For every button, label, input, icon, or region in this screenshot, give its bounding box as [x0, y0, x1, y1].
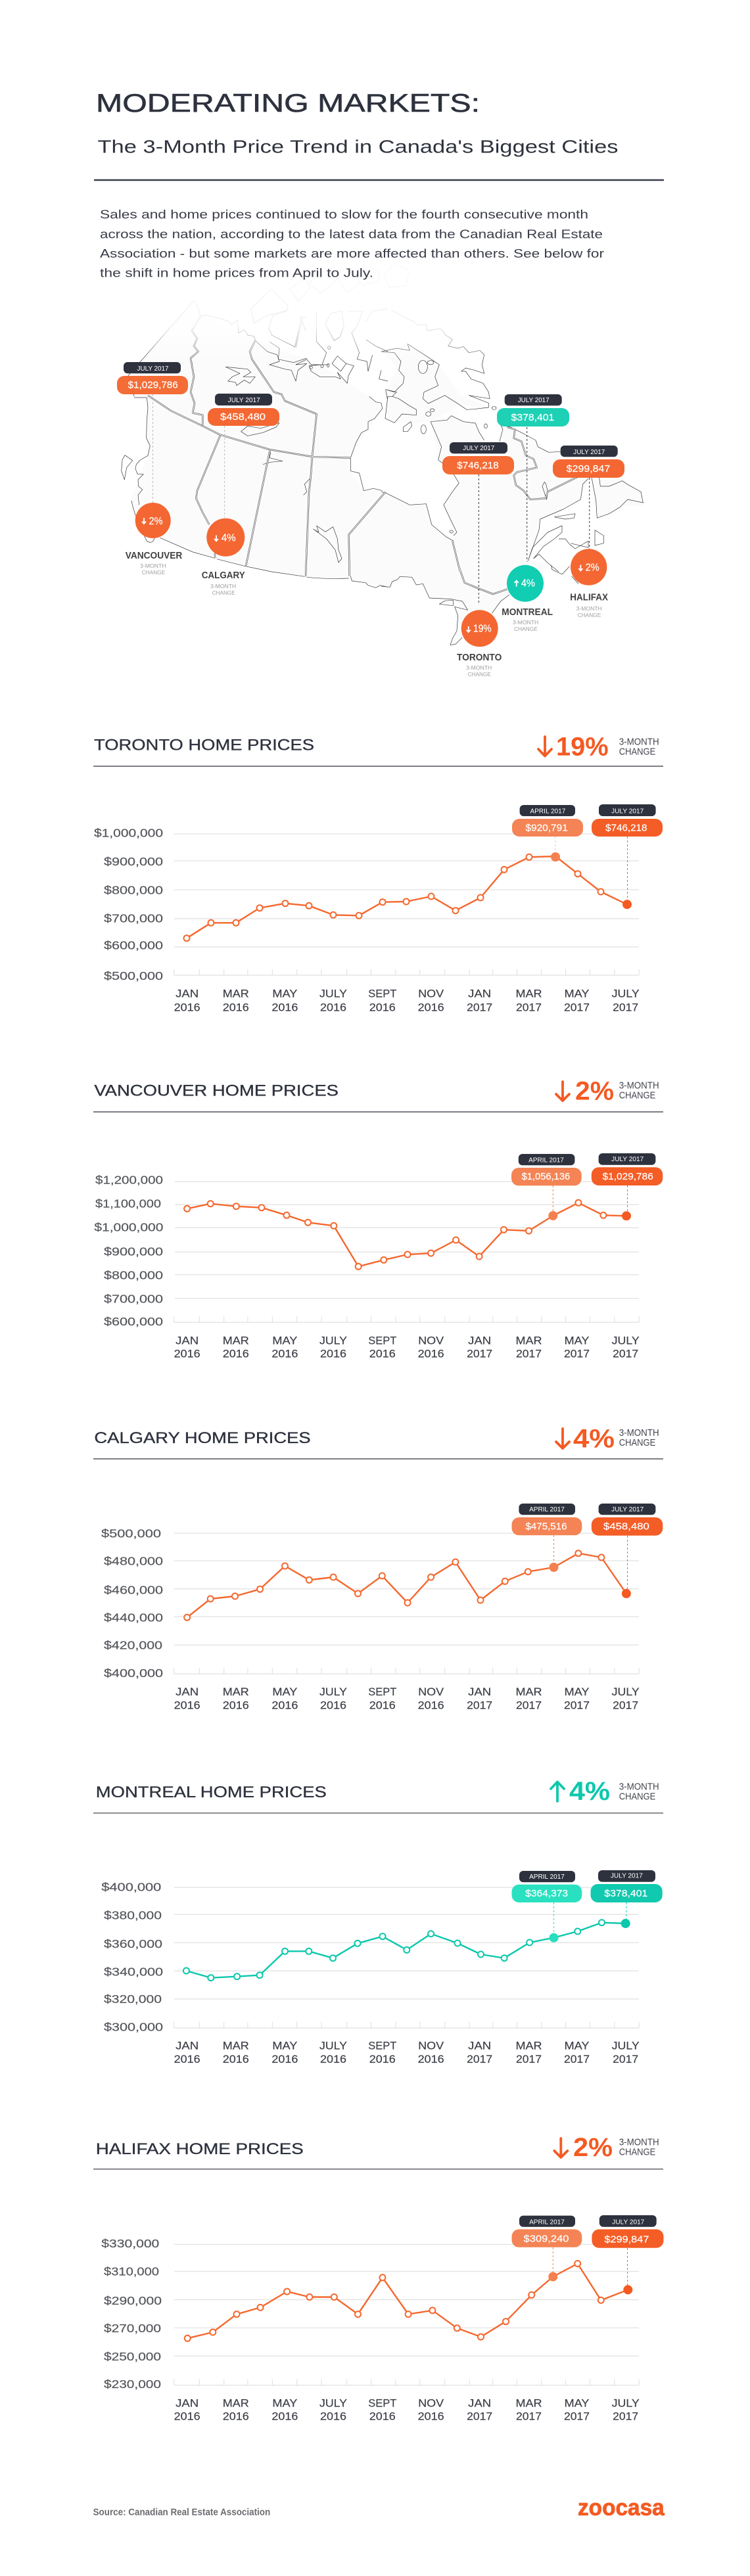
- map callout: Halifax: 2%: [586, 562, 599, 573]
- y axis labels: Toronto: $600,000: [104, 938, 163, 952]
- map callout: Montreal: [497, 394, 569, 632]
- x axis labels: Montreal: JULY: [612, 2039, 640, 2052]
- y axis labels: Calgary: $480,000: [104, 1554, 163, 1567]
- y axis labels: Vancouver: $700,000: [104, 1292, 163, 1305]
- stat: Toronto 3-month change: 19%: [556, 732, 609, 761]
- callout: Vancouver April 2017: APRIL 2017: [528, 1157, 564, 1164]
- map callout: Vancouver: $1,029,786: [128, 380, 178, 391]
- map callout: Calgary: CHANGE: [212, 589, 235, 596]
- panel: Toronto home prices: [93, 732, 663, 1013]
- x axis labels: Halifax: 2017: [564, 2410, 590, 2423]
- x axis labels: Vancouver: JAN: [176, 1334, 199, 1346]
- map callout: Calgary: JULY 2017: [228, 397, 260, 404]
- y axis labels: Montreal: $360,000: [104, 1937, 162, 1950]
- x axis labels: Halifax: 2016: [174, 2410, 200, 2423]
- x axis labels: Toronto: JAN: [176, 987, 199, 1000]
- y axis labels: Toronto: $900,000: [104, 855, 163, 868]
- y axis labels: Calgary: $400,000: [104, 1667, 163, 1680]
- line series: Montreal: [186, 1923, 626, 1978]
- stat: Montreal 3-month change: CHANGE: [619, 1791, 655, 1802]
- map callout: Halifax: JULY 2017: [573, 449, 605, 456]
- map callout: Montreal: MONTREAL: [502, 607, 553, 618]
- x axis labels: Toronto: 2016: [223, 1001, 249, 1013]
- x axis labels: Calgary: JAN: [176, 1686, 199, 1698]
- x axis labels: Calgary: 2016: [320, 1699, 346, 1711]
- y axis labels: Toronto: [94, 826, 163, 982]
- map of Canada: [85, 260, 664, 645]
- x axis labels: Calgary: 2017: [516, 1699, 542, 1711]
- x axis labels: Vancouver: JAN: [468, 1334, 491, 1346]
- x axis labels: Calgary: 2017: [613, 1699, 638, 1711]
- map callout: Calgary: CALGARY: [202, 570, 245, 581]
- map callout: Toronto: TORONTO: [457, 653, 502, 663]
- x axis labels: Halifax: MAR: [515, 2397, 542, 2410]
- stat: Vancouver 3-month change: [556, 1076, 659, 1105]
- stat: Calgary 3-month change: 4%: [573, 1424, 615, 1453]
- x axis labels: Toronto: [174, 987, 640, 1013]
- heading: Calgary: CALGARY HOME PRICES: [94, 1429, 311, 1447]
- x axis labels: Vancouver: SEPT: [368, 1334, 396, 1346]
- map callout: Vancouver: CHANGE: [142, 569, 166, 576]
- map callout: Halifax: CHANGE: [578, 612, 601, 618]
- y axis labels: Toronto: $800,000: [104, 883, 163, 896]
- callout: Toronto April 2017: APRIL 2017: [530, 808, 566, 815]
- stat: Calgary 3-month change: CHANGE: [619, 1437, 655, 1448]
- map callout: Montreal: 4%: [521, 578, 535, 589]
- x axis labels: Halifax: JULY: [612, 2397, 640, 2410]
- x axis labels: Vancouver: 2016: [320, 1347, 346, 1360]
- stat: Halifax 3-month change: 2%: [573, 2133, 613, 2162]
- x axis labels: Toronto: JULY: [612, 987, 640, 1000]
- y axis labels: Halifax: $270,000: [104, 2322, 161, 2335]
- logo: zoocasa: zoocasa: [578, 2495, 665, 2520]
- stat: Halifax 3-month change: 3-MONTH: [619, 2137, 659, 2148]
- map callout: Calgary: 4%: [222, 532, 236, 543]
- subtitle: The 3-Month Price Trend in Canada's Biggest Cities: [97, 137, 618, 157]
- heading: Toronto: TORONTO HOME PRICES: [94, 737, 314, 754]
- x axis labels: Halifax: JAN: [468, 2397, 491, 2410]
- x axis labels: Halifax: 2016: [271, 2410, 298, 2423]
- y axis labels: Halifax: [101, 2237, 162, 2391]
- y axis labels: Calgary: $500,000: [101, 1527, 161, 1540]
- x axis labels: Vancouver: 2017: [564, 1347, 590, 1360]
- y axis labels: Vancouver: [94, 1173, 164, 1328]
- map dashed leader lines: [152, 394, 590, 605]
- y axis labels: Vancouver: $1,100,000: [95, 1197, 161, 1210]
- y axis labels: Calgary: $440,000: [104, 1611, 163, 1624]
- x axis labels: Montreal: 2016: [418, 2053, 444, 2065]
- x axis labels: Halifax: 2017: [467, 2410, 492, 2423]
- x axis labels: Vancouver: MAR: [515, 1334, 542, 1346]
- heading: Halifax: HALIFAX HOME PRICES: [96, 2140, 304, 2158]
- x axis labels: Montreal: 2016: [369, 2053, 396, 2065]
- x axis labels: Halifax: 2016: [418, 2410, 444, 2423]
- callout: Calgary April 2017: $475,516: [526, 1521, 567, 1532]
- y axis labels: Halifax: $230,000: [104, 2378, 161, 2391]
- callout: Halifax April 2017: $309,240: [523, 2234, 569, 2244]
- stat: Vancouver 3-month change: 3-MONTH: [619, 1080, 659, 1092]
- map callout: Halifax: 3-MONTH: [576, 605, 602, 612]
- x axis labels: Montreal: 2017: [467, 2053, 492, 2065]
- x axis labels: Halifax: [174, 2397, 640, 2423]
- panel: Vancouver home prices: [93, 1076, 663, 1360]
- x axis labels: Halifax: NOV: [418, 2397, 444, 2410]
- x axis labels: Halifax: 2016: [320, 2410, 346, 2423]
- stat: Montreal 3-month change: 4%: [569, 1777, 610, 1806]
- x axis labels: Vancouver: [174, 1334, 640, 1360]
- map callout: Toronto: 19%: [473, 624, 492, 635]
- chart: Toronto line chart: [94, 804, 663, 1013]
- x axis labels: Calgary: 2016: [174, 1699, 200, 1711]
- x axis labels: Toronto: MAY: [564, 987, 589, 1000]
- x axis labels: Calgary: NOV: [418, 1686, 444, 1698]
- x axis labels: Toronto: 2016: [174, 1001, 200, 1013]
- x axis labels: Halifax: MAY: [564, 2397, 589, 2410]
- data points: Toronto: [184, 854, 603, 941]
- callout: Halifax July 2017: $299,847: [604, 2234, 649, 2245]
- x axis labels: Halifax: MAY: [272, 2397, 297, 2410]
- x axis labels: Montreal: 2017: [564, 2053, 590, 2065]
- x axis labels: Toronto: 2016: [271, 1001, 298, 1013]
- x axis labels: Vancouver: 2016: [271, 1347, 298, 1360]
- y axis labels: Montreal: $400,000: [101, 1880, 162, 1893]
- callout: Halifax July 2017: [592, 2215, 664, 2294]
- x axis labels: Halifax: JULY: [319, 2397, 347, 2410]
- callout: Toronto April 2017: $920,791: [525, 823, 568, 833]
- x axis labels: Montreal: SEPT: [368, 2039, 396, 2052]
- y axis labels: Calgary: [101, 1527, 163, 1680]
- y axis labels: Vancouver: $1,000,000: [94, 1220, 164, 1233]
- x axis labels: Halifax: 2017: [613, 2410, 638, 2423]
- x axis labels: Calgary: JAN: [468, 1686, 491, 1698]
- x axis labels: Toronto: MAY: [272, 987, 297, 1000]
- x axis labels: Halifax: SEPT: [368, 2397, 396, 2410]
- callout: Halifax July 2017: JULY 2017: [612, 2219, 645, 2226]
- map callout: Montreal: CHANGE: [514, 626, 538, 632]
- map callout: Halifax: $299,847: [567, 464, 610, 474]
- x axis labels: Calgary: 2016: [369, 1699, 396, 1711]
- x axis labels: Toronto: SEPT: [368, 987, 396, 1000]
- x axis labels: Vancouver: 2016: [174, 1347, 200, 1360]
- callout: Calgary April 2017: [511, 1504, 582, 1572]
- map callout: Halifax: HALIFAX: [570, 592, 608, 603]
- x axis labels: Montreal: [174, 2039, 640, 2065]
- x axis labels: Montreal: 2016: [174, 2053, 200, 2065]
- callout: Halifax April 2017: APRIL 2017: [529, 2219, 565, 2226]
- x axis labels: Montreal: 2017: [613, 2053, 638, 2065]
- x axis labels: Montreal: JAN: [176, 2039, 199, 2052]
- callout: Toronto July 2017: $746,218: [605, 823, 647, 833]
- stat: Toronto 3-month change: CHANGE: [619, 746, 655, 757]
- x axis labels: Toronto: 2017: [564, 1001, 590, 1013]
- intro paragraph: Sales and home prices continued to slow for the fourth consecutive month: [100, 208, 588, 221]
- y axis labels: Calgary: $460,000: [104, 1583, 163, 1596]
- x axis labels: Toronto: 2016: [320, 1001, 346, 1013]
- x axis labels: Toronto: 2017: [613, 1001, 638, 1013]
- x axis labels: Toronto: MAR: [223, 987, 249, 1000]
- stat: Vancouver 3-month change: 2%: [575, 1076, 614, 1105]
- x axis labels: Montreal: MAY: [564, 2039, 589, 2052]
- x axis labels: Toronto: 2016: [418, 1001, 444, 1013]
- callout: Montreal July 2017: $378,401: [604, 1889, 647, 1899]
- x axis labels: Halifax: JAN: [176, 2397, 199, 2410]
- map callout: Vancouver: VANCOUVER: [126, 551, 183, 561]
- map callout: Toronto: $746,218: [457, 461, 499, 471]
- callout: Calgary July 2017: $458,480: [603, 1522, 649, 1532]
- x axis labels: Vancouver: 2016: [369, 1347, 396, 1360]
- callout: Halifax April 2017: [511, 2216, 582, 2282]
- map callout: Toronto: CHANGE: [468, 671, 491, 678]
- line series: Vancouver: [187, 1203, 626, 1266]
- y axis labels: Halifax: $250,000: [104, 2350, 161, 2363]
- callout: Calgary April 2017: APRIL 2017: [529, 1506, 565, 1513]
- x axis labels: Vancouver: NOV: [418, 1334, 444, 1346]
- callout: Vancouver July 2017: JULY 2017: [611, 1156, 644, 1163]
- map callout: Vancouver: 2%: [149, 516, 163, 527]
- x axis labels: Vancouver: 2017: [613, 1347, 638, 1360]
- data points: Calgary: [184, 1550, 604, 1621]
- x axis labels: Toronto: 2017: [516, 1001, 542, 1013]
- map callout: Montreal: 3-MONTH: [513, 619, 538, 626]
- x axis labels: Toronto: JAN: [468, 987, 491, 1000]
- map callout: Montreal: $378,401: [511, 413, 554, 423]
- callout: Vancouver April 2017: $1,056,136: [522, 1172, 570, 1182]
- x axis labels: Calgary: 2016: [271, 1699, 298, 1711]
- heading: Vancouver: VANCOUVER HOME PRICES: [94, 1082, 339, 1100]
- chart: Calgary line chart: [101, 1504, 663, 1711]
- callout: Calgary July 2017: JULY 2017: [611, 1506, 644, 1513]
- x axis labels: Vancouver: JULY: [612, 1334, 640, 1346]
- x axis labels: Montreal: 2016: [271, 2053, 298, 2065]
- x axis labels: Calgary: 2016: [223, 1699, 249, 1711]
- stat: Halifax 3-month change: [554, 2133, 659, 2162]
- y axis labels: Montreal: [101, 1880, 163, 2033]
- map callout: Calgary: $458,480: [220, 412, 266, 423]
- x axis labels: Halifax: 2017: [516, 2410, 542, 2423]
- stat: Toronto 3-month change: 3-MONTH: [619, 736, 659, 747]
- y axis labels: Montreal: $340,000: [104, 1965, 163, 1978]
- y axis labels: Montreal: $320,000: [104, 1992, 162, 2006]
- map callout: Calgary: 3-MONTH: [210, 583, 236, 589]
- x axis labels: Montreal: MAY: [272, 2039, 297, 2052]
- line series: Calgary: [187, 1553, 626, 1617]
- x axis labels: Toronto: 2017: [467, 1001, 492, 1013]
- y axis labels: Calgary: $420,000: [104, 1638, 162, 1651]
- x axis labels: Toronto: MAR: [515, 987, 542, 1000]
- callout: Montreal April 2017: $364,373: [525, 1889, 568, 1899]
- callout: Montreal July 2017: [590, 1870, 663, 1928]
- line series: Halifax: [187, 2264, 628, 2338]
- callout: Vancouver July 2017: $1,029,786: [603, 1172, 653, 1182]
- x axis labels: Montreal: 2016: [223, 2053, 249, 2065]
- stat: Montreal 3-month change: [551, 1777, 659, 1806]
- callout: Montreal April 2017: [511, 1871, 582, 1943]
- panel: Montreal home prices: [93, 1777, 663, 2065]
- callout: Toronto July 2017: JULY 2017: [611, 808, 644, 815]
- callout: Calgary July 2017: [592, 1504, 663, 1598]
- x axis labels: Calgary: 2016: [418, 1699, 444, 1711]
- intro paragraph: Association - but some markets are more affected than others. See below for: [100, 246, 604, 260]
- map callout: Vancouver: 3-MONTH: [140, 563, 166, 569]
- x axis labels: Toronto: JULY: [319, 987, 347, 1000]
- callout: Montreal April 2017: APRIL 2017: [529, 1874, 565, 1881]
- y axis labels: Toronto: $700,000: [104, 912, 163, 925]
- x axis labels: Calgary: 2017: [564, 1699, 590, 1711]
- title: MODERATING MARKETS:: [96, 89, 480, 118]
- map callout: Toronto: 3-MONTH: [466, 664, 492, 671]
- stat: Montreal 3-month change: 3-MONTH: [619, 1781, 659, 1792]
- chart: Vancouver line chart: [94, 1153, 663, 1360]
- y axis labels: Toronto: $1,000,000: [94, 826, 163, 839]
- heading: Montreal: MONTREAL HOME PRICES: [96, 1783, 327, 1801]
- x axis labels: Montreal: 2017: [516, 2053, 542, 2065]
- x axis labels: Calgary: [174, 1686, 640, 1711]
- x axis labels: Halifax: 2016: [369, 2410, 396, 2423]
- y axis labels: Halifax: $310,000: [104, 2265, 159, 2278]
- chart: Halifax line chart: [101, 2215, 664, 2423]
- callout: Montreal July 2017: JULY 2017: [611, 1873, 643, 1880]
- x axis labels: Montreal: NOV: [418, 2039, 444, 2052]
- data points: Montreal: [183, 1920, 605, 1981]
- x axis labels: Montreal: JAN: [468, 2039, 491, 2052]
- x axis labels: Calgary: 2017: [467, 1699, 492, 1711]
- x axis labels: Vancouver: 2017: [467, 1347, 492, 1360]
- x axis labels: Montreal: MAR: [515, 2039, 542, 2052]
- x axis labels: Vancouver: MAY: [272, 1334, 297, 1346]
- x axis labels: Calgary: JULY: [612, 1686, 640, 1698]
- x axis labels: Vancouver: 2016: [418, 1347, 444, 1360]
- x axis labels: Halifax: MAR: [223, 2397, 249, 2410]
- map callout: Halifax: [553, 446, 624, 618]
- y axis labels: Halifax: $330,000: [101, 2237, 160, 2250]
- x axis labels: Calgary: MAR: [515, 1686, 542, 1698]
- x axis labels: Vancouver: 2017: [516, 1347, 542, 1360]
- map callout: Vancouver: JULY 2017: [137, 365, 169, 373]
- y axis labels: Montreal: $300,000: [104, 2020, 163, 2033]
- x axis labels: Vancouver: MAR: [223, 1334, 249, 1346]
- data points: Halifax: [185, 2261, 604, 2341]
- y axis labels: Vancouver: $1,200,000: [95, 1173, 163, 1186]
- map callout: Vancouver: [117, 362, 188, 576]
- stat: Calgary 3-month change: [556, 1424, 659, 1453]
- x axis labels: Calgary: JULY: [319, 1686, 347, 1698]
- x axis labels: Calgary: SEPT: [368, 1686, 396, 1698]
- y axis labels: Vancouver: $600,000: [104, 1315, 163, 1328]
- stat: Calgary 3-month change: 3-MONTH: [619, 1427, 659, 1438]
- x axis labels: Montreal: MAR: [223, 2039, 249, 2052]
- stat: Vancouver 3-month change: CHANGE: [619, 1090, 655, 1101]
- map callout: Toronto: [442, 442, 514, 678]
- callout: Vancouver April 2017: [511, 1154, 582, 1220]
- stat: Halifax 3-month change: CHANGE: [619, 2147, 655, 2158]
- x axis labels: Calgary: MAY: [564, 1686, 589, 1698]
- map callout: Toronto: JULY 2017: [463, 445, 495, 452]
- panel: Halifax home prices: [93, 2133, 664, 2423]
- y axis labels: Halifax: $290,000: [104, 2294, 162, 2307]
- data points: Vancouver: [184, 1200, 606, 1270]
- x axis labels: Halifax: 2016: [223, 2410, 249, 2423]
- callout: Vancouver July 2017: [592, 1153, 663, 1220]
- line series: Toronto: [187, 856, 627, 938]
- x axis labels: Vancouver: 2016: [223, 1347, 249, 1360]
- intro paragraph: [100, 208, 604, 280]
- callout: Toronto April 2017: [512, 805, 583, 862]
- x axis labels: Vancouver: MAY: [564, 1334, 589, 1346]
- callout: Toronto July 2017: [592, 804, 663, 909]
- x axis labels: Calgary: MAY: [272, 1686, 297, 1698]
- intro paragraph: across the nation, according to the latest data from the Canadian Real Estate: [100, 227, 603, 241]
- map callout: Calgary: [202, 394, 279, 596]
- stat: Toronto 3-month change: [538, 732, 659, 761]
- x axis labels: Montreal: JULY: [319, 2039, 347, 2052]
- map callout: Montreal: JULY 2017: [518, 397, 550, 404]
- y axis labels: Toronto: $500,000: [104, 969, 163, 982]
- y axis labels: Vancouver: $800,000: [104, 1268, 163, 1281]
- x axis labels: Vancouver: JULY: [319, 1334, 347, 1346]
- x axis labels: Calgary: MAR: [223, 1686, 249, 1698]
- x axis labels: Toronto: 2016: [369, 1001, 396, 1013]
- intro paragraph: the shift in home prices from April to July.: [100, 266, 373, 280]
- x axis labels: Toronto: NOV: [418, 987, 444, 1000]
- panel: Calgary home prices: [93, 1424, 663, 1711]
- y axis labels: Vancouver: $900,000: [104, 1245, 163, 1258]
- y axis labels: Montreal: $380,000: [104, 1908, 162, 1921]
- x axis labels: Montreal: 2016: [320, 2053, 346, 2065]
- chart: Montreal line chart: [101, 1870, 663, 2065]
- source note: Source: Canadian Real Estate Association: [93, 2507, 270, 2518]
